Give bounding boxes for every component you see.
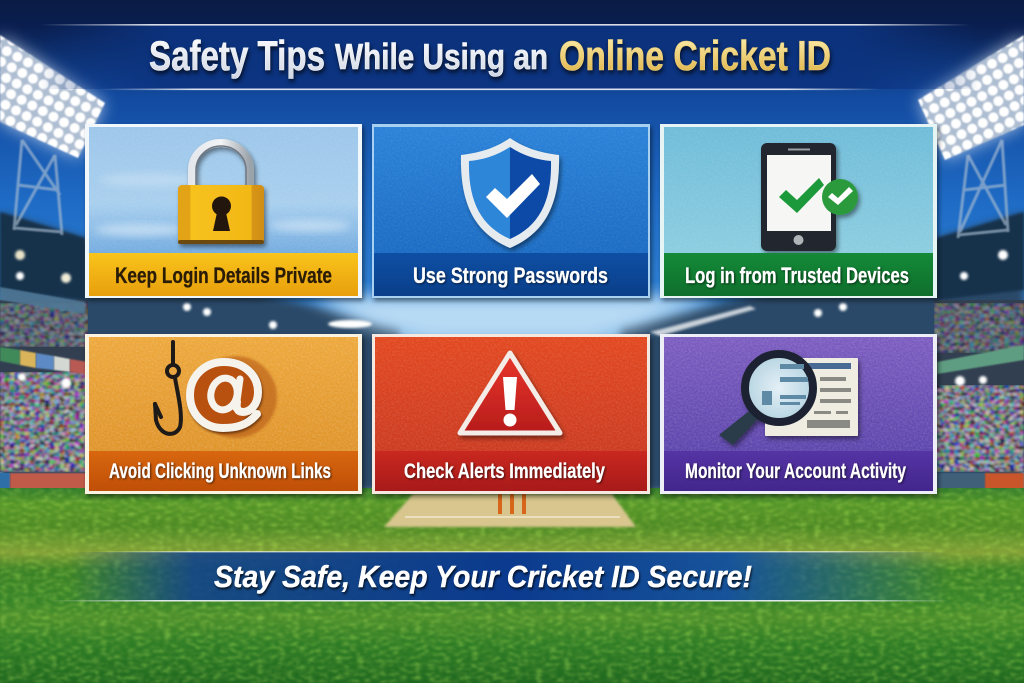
title text: Online Cricket ID [559,32,831,79]
fish hook [155,342,181,434]
title text: While Using an [335,36,548,77]
panel: log in from trusted devices [660,124,937,298]
label: Monitor Your Account Activity [685,460,906,483]
left stand [0,212,400,492]
title text: Safety Tips [149,32,325,79]
label: Avoid Clicking Unknown Links [109,460,331,483]
title text [149,32,831,79]
label: Check Alerts Immediately [404,460,605,483]
sky strip between rows [310,296,720,340]
stumps [498,494,526,514]
icon: hook and at sign [155,342,277,438]
panel: avoid clicking unknown links [85,334,362,494]
icon: padlock [178,143,264,244]
label: Use Strong Passwords [413,263,608,288]
icon: magnifier over document [719,354,858,445]
label: Keep Login Details Private [115,263,332,288]
label: Log in from Trusted Devices [685,263,909,288]
title banner [40,24,980,90]
panel: check alerts immediately [372,334,650,494]
outfield grass [0,488,1024,683]
right stand [620,212,1024,492]
right floodlight tower [958,140,1008,238]
at symbol [190,362,258,428]
panel: use strong passwords [372,124,650,298]
slogan text: Stay Safe, Keep Your Cricket ID Secure! [214,559,752,594]
cricket pitch [384,494,636,527]
icon: warning triangle [460,353,560,433]
icon: shield with check [461,138,559,248]
icon: phone with checks [761,143,858,251]
bottom banner [50,551,950,602]
left floodlights [0,35,105,158]
left floodlight tower [14,140,62,235]
panel: keep login details private [85,124,362,298]
panel: monitor your account activity [660,334,937,494]
right floodlights [918,35,1024,160]
